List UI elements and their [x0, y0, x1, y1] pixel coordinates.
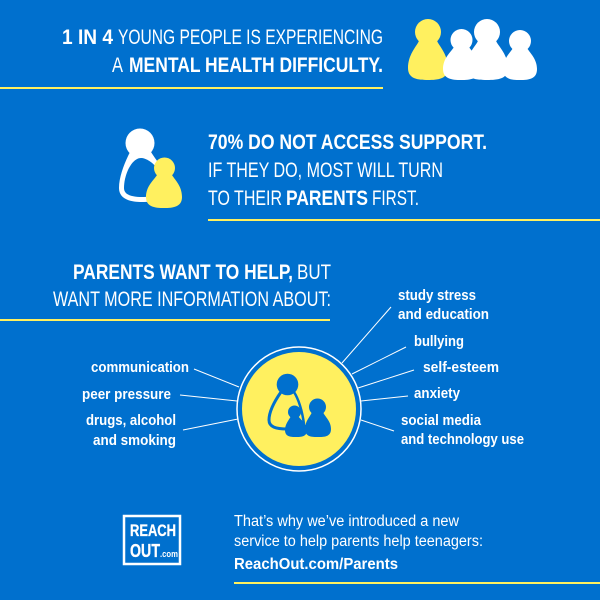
topic labels right: study stress [398, 287, 476, 304]
topic labels right: bullying [414, 333, 464, 350]
topic labels left: and smoking [93, 432, 176, 449]
logo: ReachOut.com: OUT [130, 541, 160, 561]
closing text [234, 513, 483, 573]
heading: 1 in 4 young people: YOUNG PEOPLE IS EXPERIENCING [118, 26, 383, 49]
heading: 1 in 4 young people: 1 IN 4 [62, 26, 113, 49]
icon: four people, one highlighted [408, 19, 537, 80]
topic labels left [82, 359, 189, 449]
heading: parents want to help: WANT MORE INFORMATION ABOUT: [53, 288, 331, 311]
topic labels right [398, 287, 524, 448]
connector lines [180, 307, 414, 431]
heading: 70% do not access support: TO THEIR [208, 187, 282, 210]
topic labels right: and education [398, 306, 489, 323]
heading: parents want to help [53, 261, 331, 311]
topic labels right: and technology use [401, 431, 524, 448]
heading: 70% do not access support [208, 131, 487, 210]
heading: 70% do not access support: IF THEY DO, MOST WILL TURN [208, 159, 443, 182]
topic labels left: communication [91, 359, 189, 376]
topic labels left: drugs, alcohol [86, 412, 176, 429]
topic labels right: social media [401, 412, 482, 429]
topic labels left: peer pressure [82, 386, 171, 403]
heading: 1 in 4 young people [62, 26, 383, 77]
logo: ReachOut.com: .com [160, 549, 178, 560]
topic labels right: self-esteem [423, 359, 499, 376]
central circle with family icon [237, 347, 361, 471]
heading: parents want to help: BUT [297, 261, 331, 284]
logo: ReachOut.com [124, 516, 180, 564]
icon: parent with child [119, 128, 182, 208]
heading: 1 in 4 young people: MENTAL HEALTH DIFFICULTY. [129, 54, 383, 77]
closing text: That’s why we’ve introduced a new [234, 513, 460, 530]
closing text: service to help parents help teenagers: [234, 533, 483, 550]
heading: 70% do not access support: PARENTS [286, 187, 368, 210]
topic labels right: anxiety [414, 385, 461, 402]
logo: ReachOut.com: REACH [130, 521, 176, 540]
closing text: ReachOut.com/Parents [234, 556, 398, 573]
heading: 70% do not access support: 70% DO NOT ACCESS SUPPORT. [208, 131, 487, 154]
heading: 1 in 4 young people: A [112, 54, 123, 77]
heading: parents want to help: PARENTS WANT TO HELP, [73, 261, 293, 284]
heading: 70% do not access support: FIRST. [372, 187, 419, 210]
